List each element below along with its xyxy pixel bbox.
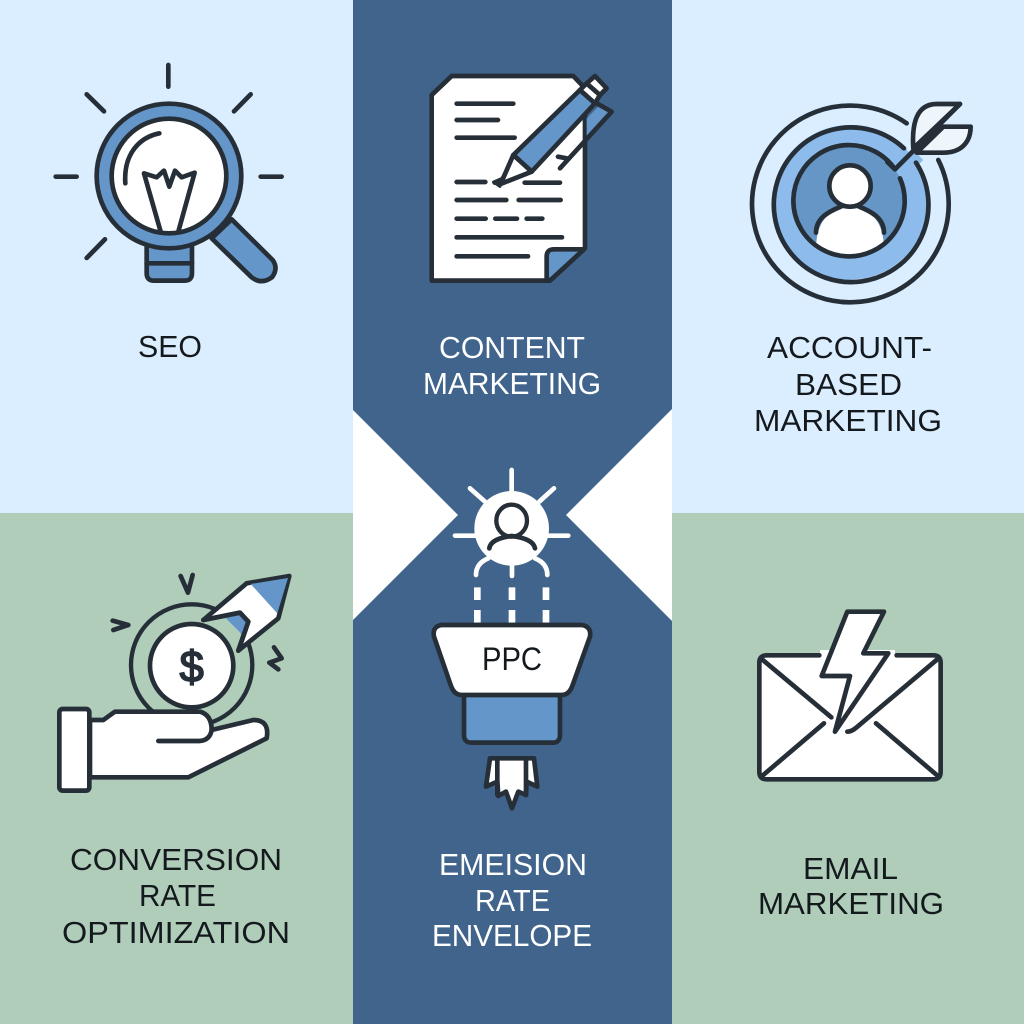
notch: left white triangle	[353, 410, 458, 620]
dashed beams	[477, 587, 546, 623]
icon: magnifier with light bulb	[56, 65, 282, 281]
icon: envelope with lightning bolt	[759, 612, 941, 779]
label: Content Marketing	[423, 330, 601, 401]
panel: Conversion Rate Optimization	[0, 513, 353, 1024]
sun with person	[455, 470, 568, 576]
panel: Email Marketing	[672, 513, 1024, 1024]
panel: SEO	[0, 0, 353, 513]
flame	[486, 758, 537, 808]
icon: hand holding coin with rocket	[59, 575, 289, 791]
label: Account-Based Marketing	[754, 330, 942, 438]
icon: PPC funnel with person and flame: PPC	[482, 641, 542, 677]
panel: center column	[353, 0, 672, 1024]
label: Conversion Rate Optimization: RATE	[139, 878, 216, 913]
panel: Account-Based Marketing	[672, 0, 1024, 513]
icon: PPC funnel with person and flame	[434, 470, 590, 808]
icon: hand holding coin with rocket: $	[180, 643, 204, 691]
funnel lower section	[464, 695, 560, 743]
label: Emission Rate Envelope: RATE	[475, 883, 550, 918]
label: Content Marketing: MARKETING	[423, 366, 601, 401]
label: Email Marketing: EMAIL	[803, 851, 898, 886]
label: Conversion Rate Optimization: CONVERSION	[70, 842, 282, 877]
label: SEO: SEO	[138, 329, 202, 364]
label: Content Marketing: CONTENT	[439, 330, 585, 365]
label: Email Marketing: MARKETING	[758, 886, 944, 921]
notch: right white triangle	[566, 409, 672, 621]
label: Email Marketing	[758, 851, 944, 921]
label: Account-Based Marketing: BASED	[795, 367, 902, 402]
label: Emission Rate Envelope: ENVELOPE	[432, 918, 592, 953]
label: Account-Based Marketing: MARKETING	[754, 403, 942, 438]
label: Emission Rate Envelope: EMEISION	[439, 847, 587, 882]
funnel top with PPC	[434, 625, 590, 695]
label: Conversion Rate Optimization	[62, 842, 290, 950]
icon: target with person and arrow	[752, 104, 971, 302]
label: Emission Rate Envelope	[432, 847, 592, 953]
label: Account-Based Marketing: ACCOUNT-	[767, 330, 932, 365]
label: Conversion Rate Optimization: OPTIMIZATION	[62, 915, 290, 950]
icon: document with pen	[432, 76, 612, 281]
